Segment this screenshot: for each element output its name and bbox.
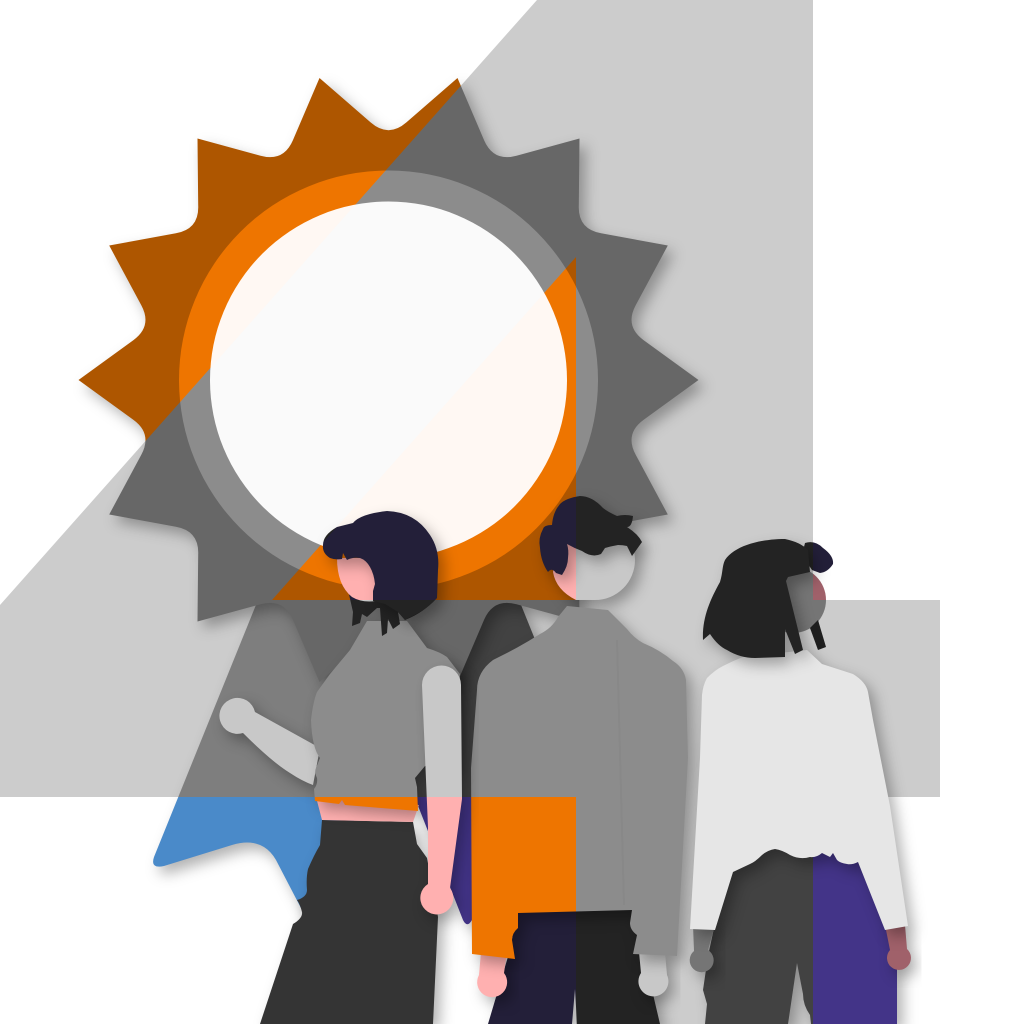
right woman's right hand [885,925,911,970]
man's left hand [477,952,507,997]
woman's hair [323,511,438,620]
right woman's hair bun [802,542,833,573]
woman's extended arm [219,698,320,785]
man's hair [539,496,642,575]
sun ring [179,170,598,590]
woman's face [337,558,378,602]
sun badge [78,78,698,682]
sun centre [210,202,567,558]
jacket sleeve seam [617,640,624,905]
man's trousers [488,905,660,1024]
right woman's left hand [690,925,715,972]
woman's midriff [316,797,419,822]
award ribbon: right tail [337,590,624,924]
sun rays [78,78,698,682]
person: woman on right [690,539,911,1024]
person: woman on left [219,511,462,1024]
man's right hand [638,952,668,996]
right woman's sweater [690,650,908,930]
right woman's trousers [703,840,897,1024]
award ribbon: left tail [153,590,440,921]
man's head [553,520,635,600]
right woman's face [760,567,826,633]
woman's trousers [260,820,438,1024]
woman's hanging arm [420,666,462,914]
woman's top [311,621,460,811]
woman's back hair [348,560,436,636]
person: man in jacket [471,496,688,1024]
man's jacket [471,606,688,959]
right woman's hair [703,539,810,658]
right woman's hair strand [810,620,826,650]
